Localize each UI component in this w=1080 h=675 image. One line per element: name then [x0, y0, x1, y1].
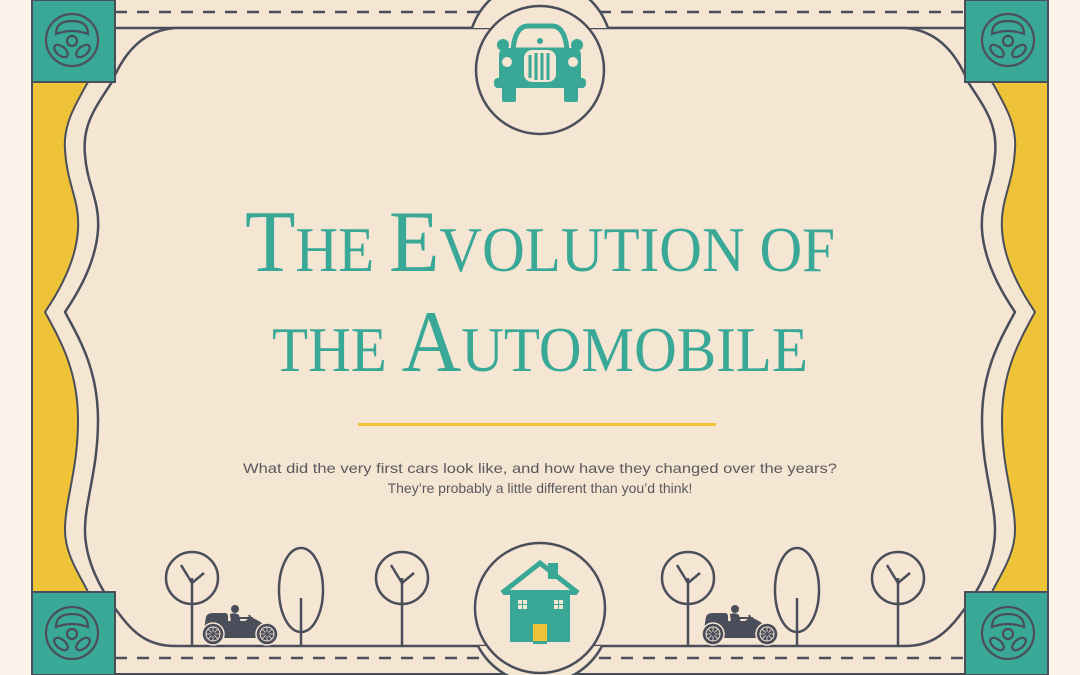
top and bottom border lines — [115, 12, 1000, 658]
divider line — [358, 423, 716, 426]
trees — [166, 548, 924, 646]
subtitle: What did the very first cars look like, and how have they changed over the years? — [243, 460, 837, 476]
title: THE AUTOMOBILE — [272, 294, 808, 391]
subtitle — [243, 460, 837, 496]
title — [245, 194, 835, 391]
icon: house medallion — [475, 543, 605, 675]
icon: vintage cars — [202, 605, 778, 645]
subtitle: They’re probably a little different than you’d think! — [388, 480, 692, 496]
icon: top car medallion — [472, 0, 608, 134]
yellow side strips — [32, 82, 88, 592]
title: THE EVOLUTION OF — [245, 194, 835, 291]
